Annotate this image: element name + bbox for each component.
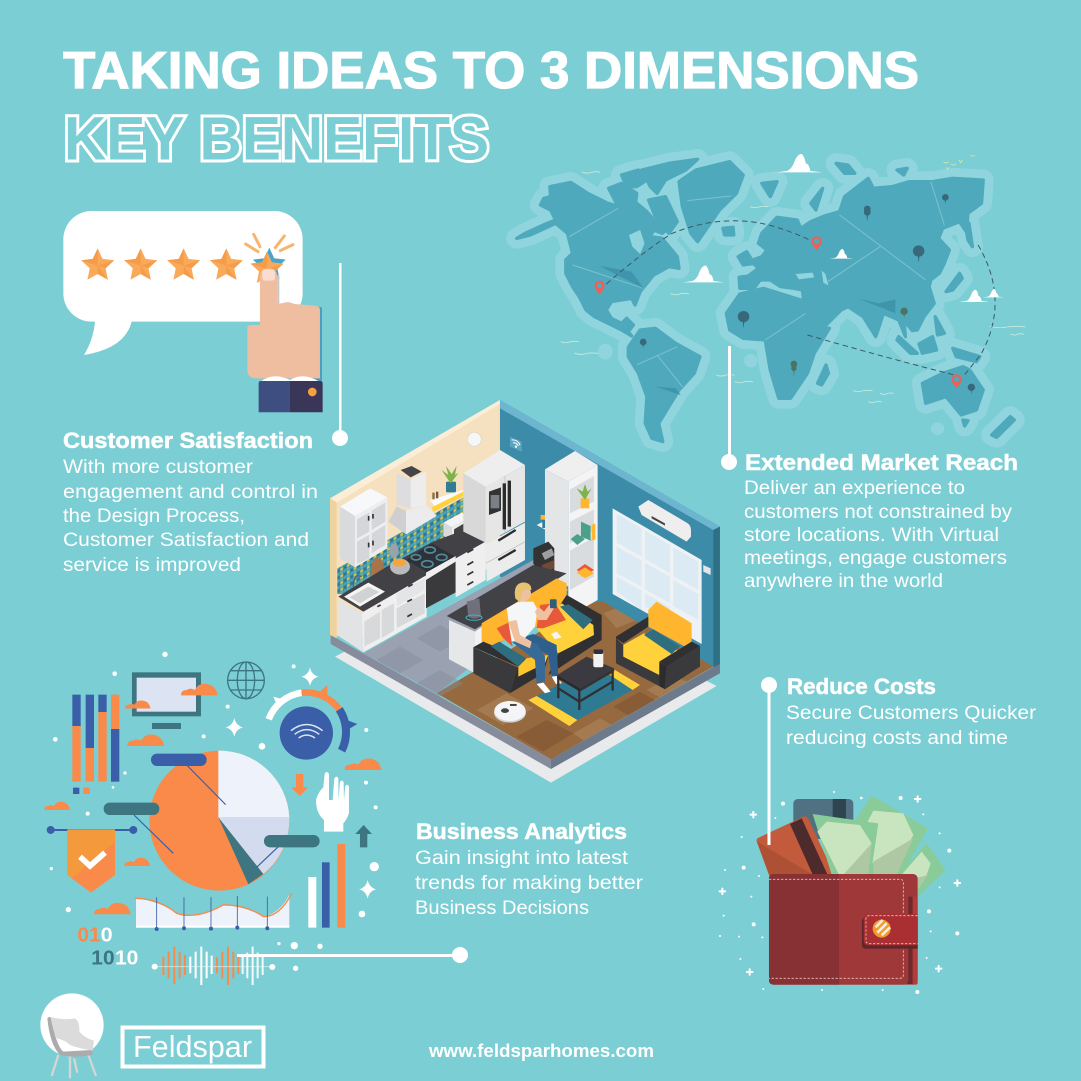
room: right wall: [500, 400, 720, 667]
room: floor shadow: [335, 651, 717, 783]
wall plant and shelf: [430, 466, 463, 512]
wifi dial: [269, 685, 357, 760]
room: tiled floor: [363, 560, 568, 693]
shelf with mugs: [537, 515, 567, 539]
text block: extended market reach: [744, 450, 1018, 592]
map: continents: [517, 159, 1014, 442]
body copy: [63, 456, 318, 576]
vertical bars: [308, 844, 345, 928]
connector: reduce costs: [761, 677, 777, 845]
business analytics illustration: [44, 652, 381, 985]
body copy: With more customer: [63, 456, 254, 478]
map: dark location pins: [640, 194, 975, 395]
customer satisfaction illustration: speech bubble and hand: [63, 211, 323, 412]
air conditioner: [638, 500, 691, 542]
body copy: Deliver an experience to: [744, 477, 965, 499]
binary digits: 0: [101, 924, 113, 946]
smoke alarm: [467, 432, 481, 446]
logo: feldspar wordmark box: Feldspar: [133, 1029, 252, 1064]
rug: [528, 670, 640, 726]
heading: Reduce Costs: [787, 674, 936, 699]
globe: [228, 662, 264, 699]
body copy: Business Decisions: [415, 897, 589, 919]
text block: reduce costs: [786, 674, 1037, 749]
arrows: [291, 774, 372, 847]
body copy: Secure Customers Quicker: [786, 702, 1037, 724]
dots: [719, 791, 959, 994]
text block: business analytics: [415, 819, 644, 919]
sofa: [473, 578, 602, 693]
kitchen counter: [338, 530, 486, 612]
island counter: [447, 565, 567, 673]
body copy: engagement and control in: [63, 481, 318, 503]
binary digits: [77, 924, 138, 969]
room: left wall: [330, 400, 500, 638]
white hand icon: [316, 772, 349, 832]
audio waveform: [157, 947, 270, 985]
heading: Extended Market Reach: [745, 450, 1018, 475]
binary digits: 01: [77, 924, 101, 946]
armchair: [616, 602, 700, 689]
badge with checkmark: [47, 826, 137, 893]
website url: www.feldsparhomes.com: [428, 1041, 654, 1061]
heading: Business Analytics: [416, 819, 627, 844]
refrigerator: [463, 450, 525, 582]
dark card behind: [793, 799, 853, 839]
heading: Customer Satisfaction: [63, 428, 313, 453]
connector: extended market reach: [721, 346, 737, 470]
back banknote: [837, 796, 946, 906]
monitor: [132, 672, 201, 729]
bookshelf: [545, 451, 598, 617]
base cabinets: [338, 542, 486, 652]
body copy: anywhere in the world: [744, 570, 943, 592]
body copy: store locations. With Virtual: [744, 524, 999, 546]
binary digits: 10: [115, 947, 138, 969]
speech bubble: [63, 211, 303, 355]
seated man: [507, 582, 562, 693]
body copy: trends for making better: [415, 872, 644, 894]
wallet clasp: [862, 914, 918, 949]
isometric smart home room: [330, 400, 720, 783]
coffee table: [557, 649, 614, 710]
pot on counter: [390, 559, 410, 575]
body copy: [744, 477, 1012, 592]
body copy: service is improved: [63, 554, 241, 576]
binary digits: 10: [91, 947, 115, 969]
map: wave marks: [561, 172, 1025, 403]
scattered dots: [50, 652, 379, 971]
map: ocean puddles: [598, 344, 944, 435]
click rays: [246, 234, 293, 252]
stacked bar chart: [72, 695, 119, 794]
logo: chair icon: [40, 993, 104, 1078]
tile backsplash: [337, 497, 463, 594]
text block: customer satisfaction: [63, 428, 318, 576]
title: TAKING IDEAS TO 3 DIMENSIONS: [63, 42, 919, 100]
connector: business analytics: [237, 947, 468, 963]
sink: [344, 576, 385, 607]
map: dashed flight routes: [606, 221, 995, 377]
body copy: Customer Satisfaction and: [63, 529, 309, 551]
wallet body: [769, 874, 918, 985]
body copy: Gain insight into latest: [415, 847, 629, 869]
body copy: [786, 702, 1037, 749]
kettle: [466, 598, 482, 620]
microwave: [443, 513, 470, 541]
room: wood floor: [437, 602, 713, 759]
body copy: the Design Process,: [63, 505, 245, 527]
cutting board: [371, 557, 384, 577]
washer dial: [389, 543, 399, 558]
robot vacuum: [494, 701, 526, 723]
body copy: meetings, engage customers: [744, 547, 1007, 569]
room: base: [331, 635, 720, 769]
cooktop: [406, 543, 455, 573]
window: [613, 508, 702, 644]
sparkles: [719, 795, 961, 976]
range hood: [388, 466, 437, 534]
map: white clouds: [683, 154, 1004, 302]
hand pointing: [247, 268, 323, 412]
pie chart: [104, 751, 320, 891]
upper cabinet: [340, 488, 387, 567]
subtitle: key benefits outlined: KEY BENEFITS: [64, 104, 489, 172]
room: tile pattern: [377, 625, 463, 697]
body copy: customers not constrained by: [744, 501, 1012, 523]
wifi sign: [510, 437, 522, 452]
map: birds: [943, 155, 975, 169]
connector: customer satisfaction: [332, 263, 348, 446]
rating stars: [81, 248, 286, 283]
body copy: reducing costs and time: [786, 727, 1008, 749]
orange clouds: [44, 684, 381, 914]
map: red location pins: [594, 236, 962, 388]
orange credit card: [757, 816, 840, 887]
wall switch: [703, 565, 711, 575]
wallet illustration: [719, 791, 961, 994]
sparkles: [226, 667, 376, 899]
front banknote: [813, 814, 878, 880]
map: coastal halo: [517, 159, 1014, 442]
coffee machine: [533, 542, 554, 577]
body copy: [415, 847, 644, 919]
world map illustration: [517, 154, 1025, 442]
area line chart: [135, 893, 292, 931]
